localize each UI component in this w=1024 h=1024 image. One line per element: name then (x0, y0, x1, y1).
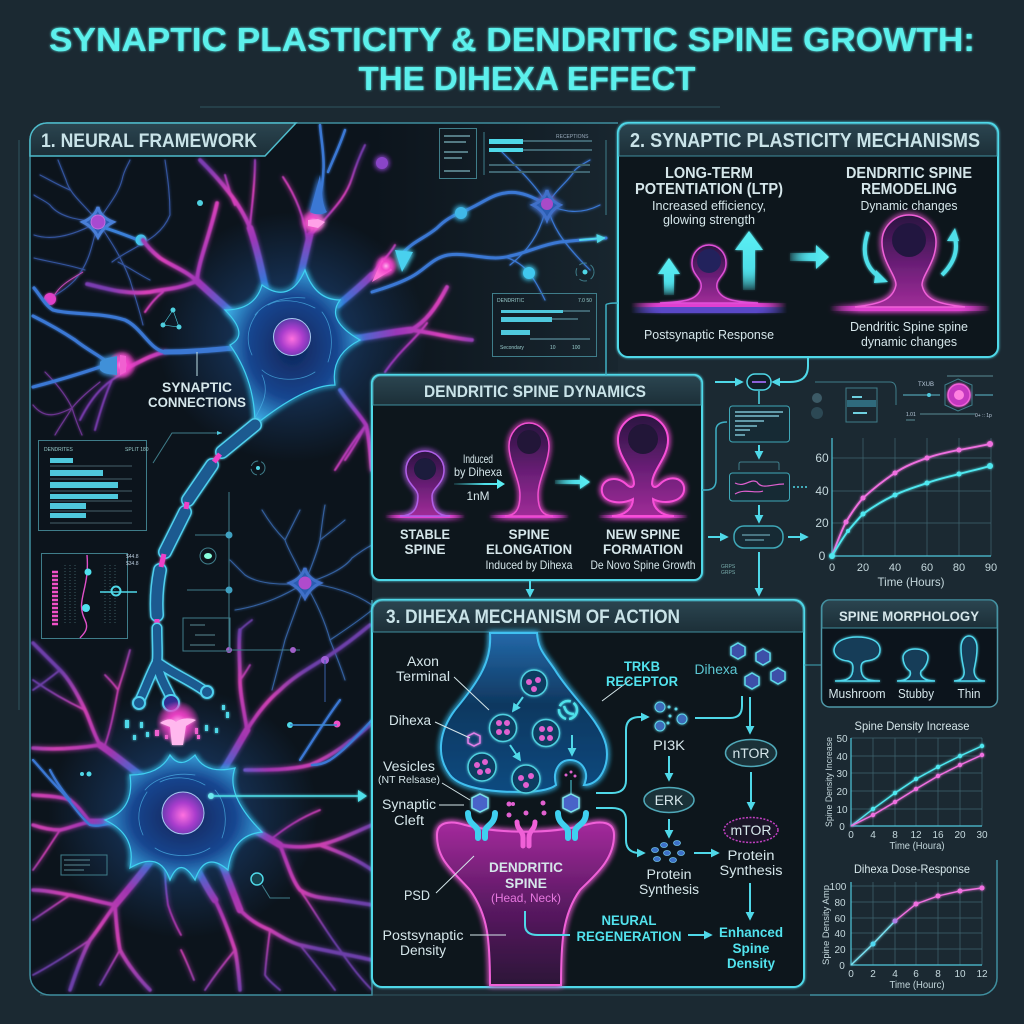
induced by dihexa annotation: by Dihexa (454, 465, 502, 479)
panel background (30, 123, 372, 995)
enhanced spine density label: Density (727, 956, 775, 971)
right labels: Synthesis (720, 863, 783, 878)
small background neuron: lower right (230, 505, 372, 690)
stable spine (385, 451, 465, 518)
caption: dendritic spine dynamic changes: dynamic changes (861, 334, 957, 349)
induced by dihexa annotation (454, 452, 505, 503)
remodeling text (846, 165, 972, 213)
panel: neural framework (30, 123, 618, 995)
mushroom spine (834, 637, 880, 681)
panel: spine morphology: SPINE MORPHOLOGY (839, 608, 980, 624)
mini dashboards above dynamics panel: 10 (550, 345, 556, 351)
remodeling curved arrows (865, 228, 959, 283)
right labels (606, 659, 783, 897)
remodeling text: REMODELING (861, 181, 957, 198)
elongation label: SPINE (508, 527, 550, 542)
panel 1 outline (30, 123, 618, 995)
dihexa molecules in cleft (468, 733, 579, 812)
morphology labels: Thin (958, 687, 981, 701)
panel: dihexa mechanism of action: 3. DIHEXA MECHANISM OF ACTION (386, 607, 680, 628)
neuron 2 blue left branches (33, 700, 372, 826)
soma 2 texture (139, 774, 225, 856)
dendritic spine label: (Head, Neck) (491, 891, 561, 905)
left labels: (NT Relsase) (378, 774, 440, 786)
panel: dihexa mechanism of action (372, 600, 804, 987)
LTP up arrows (658, 231, 763, 295)
right labels: Protein (646, 867, 692, 882)
elongated spine (489, 423, 569, 518)
chart: dihexa dose-response: Spine Density Amp (821, 885, 831, 965)
remodeling text: Dynamic changes (860, 198, 958, 213)
chart: spine density increase: 50 (836, 734, 848, 745)
vesicles (468, 670, 560, 793)
chart: time course: 90 (985, 562, 997, 574)
LTP text: POTENTIATION (LTP) (635, 181, 783, 198)
mini dashboards above dynamics panel: Secondary (500, 345, 524, 351)
mini data panel: bars: SPLIT 180 (125, 447, 149, 453)
label: synaptic connections: CONNECTIONS (148, 394, 246, 410)
soma 1 texture (248, 298, 331, 418)
protein cluster (652, 840, 684, 862)
chart: dihexa dose-response: 40 (834, 929, 846, 940)
chart: time course: 0 (819, 549, 826, 563)
left labels: Synaptic (382, 797, 436, 812)
decorative frame lines (19, 107, 810, 995)
leader lines (435, 677, 630, 935)
mini dashboards above dynamics panel (440, 128, 606, 356)
morphology header (822, 600, 997, 628)
chart: dihexa dose-response: 20 (834, 945, 846, 956)
LTP text: Increased efficiency, (652, 198, 766, 213)
stable spine label: SPINE (404, 542, 446, 557)
neuron 2 dendrites (33, 620, 372, 990)
flow diagram (530, 357, 808, 596)
left labels: Dihexa (389, 713, 431, 728)
chart: spine density increase: 40 (836, 752, 848, 763)
chart: spine density increase: 20 (836, 787, 848, 798)
left labels: Axon (407, 654, 439, 669)
chart: dihexa dose-response: 60 (834, 914, 846, 925)
dose response series (851, 886, 984, 965)
left labels: Postsynaptic (382, 928, 464, 943)
chart: spine density increase: Time (Houra) (890, 841, 944, 852)
dynamics header (373, 376, 701, 405)
dihexa molecule cluster (731, 643, 785, 689)
flow waveform box (730, 473, 790, 501)
induced by dihexa annotation: 1nM (466, 489, 490, 503)
LTP spine illustration (631, 245, 787, 313)
label: synaptic connections (148, 352, 246, 410)
mini dashboards above dynamics panel: 7.0 50 (578, 298, 592, 304)
left labels: Cleft (394, 813, 424, 828)
chart: time course: 60 (921, 562, 933, 574)
chart: dihexa dose-response: 100 (830, 882, 847, 893)
small background neuron: lower left magenta (33, 372, 100, 435)
panel: synaptic plasticity mechanisms (618, 123, 998, 357)
panel: dendritic spine dynamics: DENDRITIC SPINE DYNAMICS (424, 382, 646, 401)
left labels: Terminal (396, 669, 450, 684)
synaptic cleft burst (125, 701, 229, 745)
neuron 1 dendrites (80, 145, 472, 470)
chart: spine density increase: 0 (839, 822, 845, 833)
LTP text: glowing strength (663, 212, 755, 227)
trkb receptor glyph (559, 701, 577, 719)
right labels: PI3K (653, 738, 685, 753)
neuron 1 blue branches (33, 125, 606, 387)
pi3k cluster (655, 702, 687, 731)
top right mini schematic: 1.01 (906, 412, 916, 418)
chart: dihexa dose-response: 2 (870, 969, 876, 980)
series cyan (851, 744, 984, 826)
chart: spine density increase: 12 (910, 830, 922, 841)
chart: dihexa dose-response: Dihexa Dose-Response (854, 862, 970, 876)
panel 1 header: 1. NEURAL FRAMEWORK (41, 131, 257, 152)
chart: dihexa dose-response: 6 (913, 969, 919, 980)
LTP text (635, 165, 783, 227)
chart: spine density increase (824, 719, 988, 852)
chart: dihexa dose-response: 0 (839, 961, 845, 972)
top right mini schematic (811, 376, 993, 422)
connector: dynamics panel to panel 2 (606, 303, 618, 375)
signalling nodes: ERK (655, 792, 684, 808)
enhanced spine density label: Spine (732, 941, 770, 956)
elongation label: ELONGATION (486, 542, 572, 557)
mini data panel: waveform (42, 554, 139, 638)
chart: time course (815, 438, 997, 589)
signalling nodes: mTOR (731, 822, 771, 838)
label: synaptic connections: SYNAPTIC (162, 379, 232, 395)
panel: dendritic spine dynamics (372, 375, 702, 580)
chart: dihexa dose-response: 12 (976, 969, 988, 980)
chart: spine density increase: 30 (836, 769, 848, 780)
flow pill 2 (734, 526, 783, 548)
synapses and boutons of neuron 1 (100, 157, 560, 379)
chart: spine density increase: 0 (848, 830, 854, 841)
induced by dihexa annotation: Induced (463, 452, 493, 466)
chart: time course: 0 (829, 562, 835, 574)
panel 2 header (619, 124, 997, 156)
connector to spine morphology (804, 664, 821, 666)
mechanism header (373, 601, 803, 632)
mini dashboards above dynamics panel: RECEPTIONS (556, 134, 589, 140)
mini dashboards above dynamics panel: 100 (572, 345, 581, 351)
flow diagram: GRPS (721, 564, 736, 570)
top right mini schematic: 0+ :: 1p (975, 413, 992, 419)
left labels (378, 654, 464, 958)
caption: postsynaptic response: Postsynaptic Response (644, 327, 774, 342)
chart: dihexa dose-response: Time (Hourc) (890, 980, 944, 991)
chart: dihexa dose-response: 80 (834, 898, 846, 909)
formation label: FORMATION (603, 542, 683, 557)
neural regeneration label (576, 913, 682, 944)
chart: time course: 40 (889, 562, 901, 574)
caption: dendritic spine dynamic changes: Dendritic Spine spine (850, 319, 968, 334)
mini dashboards above dynamics panel: DENDRITIC (497, 298, 525, 304)
elongation label: Induced by Dihexa (486, 558, 573, 572)
caption: dendritic spine dynamic changes (850, 319, 968, 349)
chart: time course: Time (Hours) (878, 575, 944, 589)
chart: spine density increase: 8 (892, 830, 898, 841)
signalling nodes (644, 740, 778, 842)
enhanced spine density label (719, 925, 783, 971)
right labels: Synthesis (639, 882, 699, 897)
formation label: NEW SPINE (606, 527, 680, 542)
mini data panel: bars (38, 440, 149, 530)
axon with myelin segments (133, 425, 255, 711)
signalling arrows (525, 696, 751, 935)
morphology labels: Mushroom (828, 687, 886, 701)
mini data panel: bars: DENDRITES (44, 447, 74, 453)
chart: spine density increase: 10 (836, 805, 848, 816)
chart: dihexa dose-response: 0 (848, 969, 854, 980)
arrow: neuron to mechanism panel (208, 790, 367, 802)
stable spine label: STABLE (400, 527, 450, 542)
series magenta (832, 441, 993, 556)
axon terminal (441, 633, 607, 792)
neuron 2 soma (105, 755, 262, 880)
panel: synaptic plasticity mechanisms: 2. SYNAPTIC PLASTICITY MECHANISMS (630, 130, 980, 152)
series magenta (851, 753, 984, 826)
dendritic spine label: SPINE (505, 875, 547, 891)
flow pill (747, 374, 771, 390)
neural regeneration label: NEURAL (602, 913, 656, 928)
right labels: Protein (728, 848, 774, 863)
stable spine label (400, 527, 450, 557)
vesicle contents (474, 677, 576, 818)
mini UI details in panel 1 (61, 200, 340, 898)
left labels: Density (400, 943, 446, 958)
panel 1 header (30, 123, 296, 156)
chart: dihexa dose-response: 8 (935, 969, 941, 980)
thin spine (954, 636, 985, 681)
enhanced spine density label: Enhanced (719, 925, 783, 940)
left labels: Vesicles (383, 759, 435, 774)
elongation label (486, 527, 573, 572)
receptors (468, 813, 586, 846)
dendritic spine label (489, 859, 563, 905)
remodeling text: DENDRITIC SPINE (846, 165, 972, 182)
top right mini schematic: TXUB (918, 382, 934, 388)
small background neuron: top left (34, 160, 170, 325)
flow text box (730, 406, 790, 442)
panel: spine morphology (822, 600, 998, 707)
new spine formation (598, 415, 688, 518)
chart: time course: 20 (815, 516, 829, 530)
chart: time course: 20 (857, 562, 869, 574)
chart: time course: 40 (815, 484, 829, 498)
stubby spine (897, 649, 935, 681)
title: SYNAPTIC PLASTICITY & DENDRITIC SPINE GROWTH: (49, 21, 975, 58)
chart: spine density increase: Spine Density Increase (824, 737, 834, 827)
morphology labels (828, 687, 981, 701)
left labels: PSD (404, 888, 430, 903)
mini data panel: waveform: $34.8 (126, 561, 139, 567)
title: THE DIHEXA EFFECT (358, 60, 696, 97)
chart: dihexa dose-response: 10 (954, 969, 966, 980)
chart: spine density increase: 20 (954, 830, 966, 841)
right labels: Dihexa (694, 662, 738, 677)
dendritic spine post-synaptic shape (437, 822, 614, 985)
formation label (590, 527, 696, 572)
chart: dihexa dose-response: 4 (892, 969, 898, 980)
LTP text: LONG-TERM (665, 165, 753, 182)
formation label: De Novo Spine Growth (590, 558, 696, 572)
title (49, 21, 975, 97)
chart: spine density increase: Spine Density Increase (854, 719, 970, 733)
mini data panel: waveform: $44.8 (126, 554, 139, 560)
neuron 1 soma (225, 270, 360, 425)
flow diagram: GRPS (721, 570, 736, 576)
morphology labels: Stubby (898, 687, 935, 701)
remodeling spine illustration (830, 215, 990, 311)
chart: spine density increase: 16 (932, 830, 944, 841)
neural regeneration label: REGENERATION (576, 929, 682, 944)
series cyan (829, 463, 993, 559)
signalling nodes: nTOR (732, 745, 770, 761)
chart: spine density increase: 30 (976, 830, 988, 841)
chart: time course: 80 (953, 562, 965, 574)
right labels: RECEPTOR (606, 674, 678, 689)
chart: time course: 60 (815, 451, 829, 465)
chart: dihexa dose-response (810, 860, 997, 995)
arrow LTP to remodeling (790, 245, 829, 269)
arrow elongation to formation (555, 475, 590, 489)
dendritic spine label: DENDRITIC (489, 859, 563, 875)
arrow to panel 2 (580, 238, 604, 240)
vesicle arrows (510, 697, 572, 795)
right labels: TRKB (624, 659, 660, 674)
chart: spine density increase: 4 (870, 830, 876, 841)
